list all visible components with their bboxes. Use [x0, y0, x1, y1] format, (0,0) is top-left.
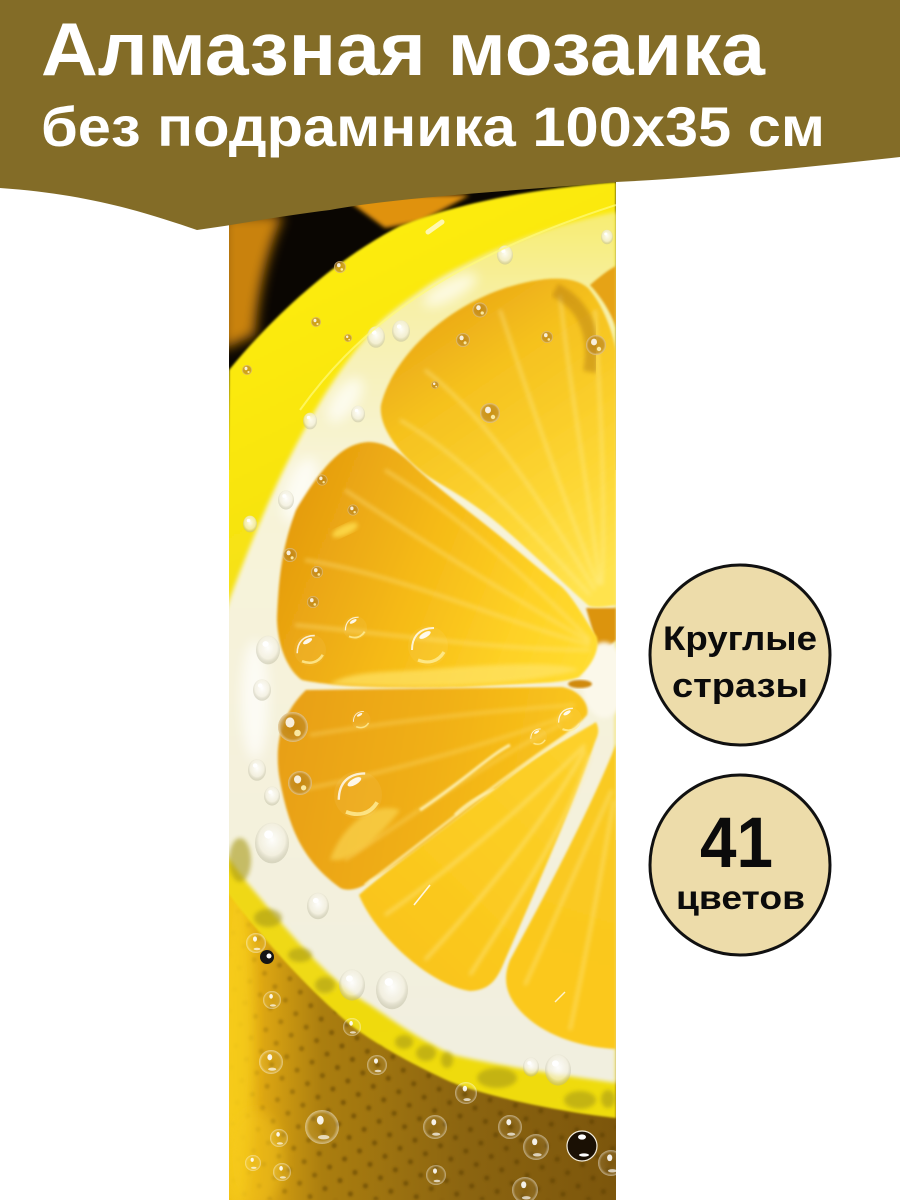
soft white highlights in pith: [241, 267, 481, 760]
lemon centre: [566, 606, 616, 718]
header banner: [0, 0, 900, 230]
water droplets on peel: [245, 933, 624, 1200]
pith bumps near rind: [229, 838, 615, 1109]
rim highlight and rind droplets: [242, 205, 616, 410]
photo: lemon slice: [215, 170, 626, 1200]
badge: round rhinestones: стразы: [672, 667, 808, 705]
title line 2: без подрамника 100х35 см: [41, 95, 825, 158]
segment lower left: [278, 687, 588, 890]
segment middle: [277, 442, 598, 687]
badge: round rhinestones: [650, 565, 830, 745]
segment lower right: [506, 744, 616, 1049]
title line 1: Алмазная мозаика: [41, 7, 766, 91]
segment top right sliver: [590, 266, 616, 328]
water droplets on segments: [278, 302, 606, 819]
lemon peel at the bottom: [222, 840, 616, 1200]
water droplets on pith: [243, 230, 613, 1086]
dark droplets: [260, 950, 597, 1161]
badge: round rhinestones: Круглые: [663, 620, 817, 658]
yellow rind: [222, 182, 616, 1118]
dark background behind the lemon: [222, 170, 616, 470]
badge: 41 colours: 41: [700, 804, 773, 883]
white pith: [215, 212, 616, 1109]
segment top: [381, 279, 616, 607]
badge: 41 colours: [650, 775, 830, 955]
badge: 41 colours: цветов: [676, 879, 805, 916]
segment lower middle: [359, 722, 598, 991]
